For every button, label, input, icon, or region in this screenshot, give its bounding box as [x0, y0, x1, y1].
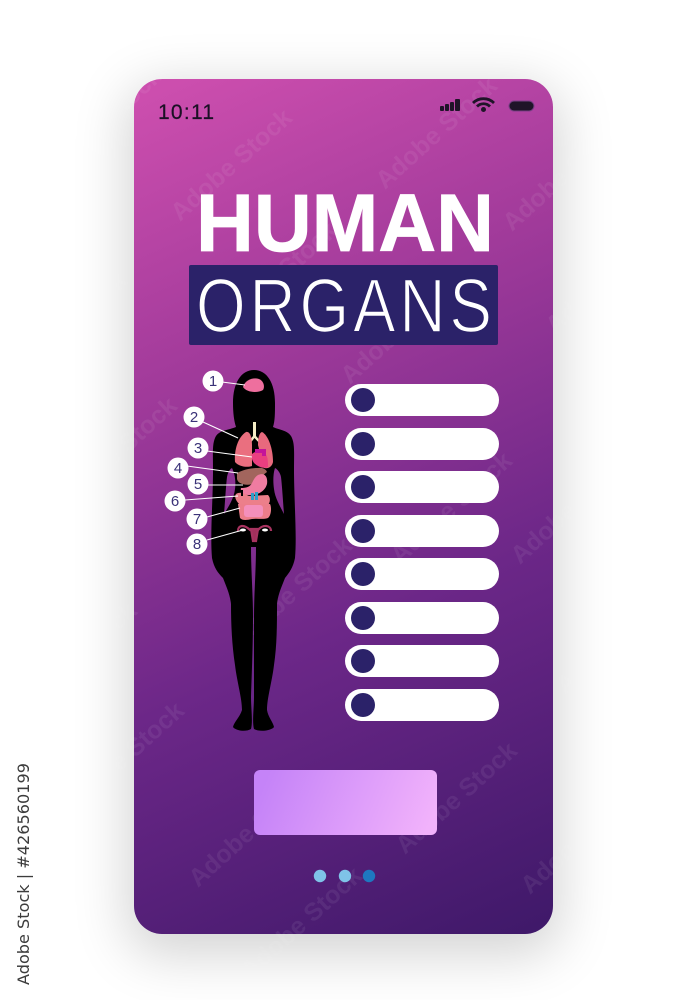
button: [254, 770, 437, 835]
watermark text: Adobe Stock: [57, 696, 190, 819]
marker 1: 1: [209, 373, 217, 390]
marker 3: 3: [194, 440, 202, 457]
watermark text: Adobe Stock: [370, 71, 503, 194]
marker 4: 4: [174, 460, 182, 477]
watermark text: Adobe Stock: [210, 216, 343, 339]
organ: trachea: [247, 422, 263, 445]
watermark text: Adobe Stock: [385, 446, 518, 569]
organ: intestines: [238, 504, 271, 520]
organ: right lung: [258, 432, 273, 468]
organ: upper intestine: [235, 493, 270, 505]
status bar icons: [440, 99, 534, 112]
organ: brain: [243, 378, 264, 392]
watermark text: Adobe Stock: [515, 776, 648, 899]
watermark text: Adobe Stock: [235, 861, 368, 984]
watermark text: Adobe Stock: [0, 266, 133, 389]
phone drop shadow: [134, 79, 553, 934]
watermark text: Adobe Stock: [35, 61, 168, 184]
legend row 2: [345, 428, 499, 460]
legend row 8: [345, 689, 499, 721]
marker 2: [184, 406, 204, 428]
status bar clock: 10:11: [158, 101, 214, 124]
watermark text: Adobe Stock: [50, 391, 183, 514]
marker 1: [202, 370, 224, 392]
organ: liver: [237, 468, 267, 485]
watermark text: Adobe Stock: [225, 531, 358, 654]
watermark text: Adobe Stock: [335, 266, 468, 389]
watermark text: Adobe Stock: [390, 736, 523, 859]
organ: vessels: [255, 449, 266, 456]
watermark text: Adobe Stock: [497, 113, 630, 236]
marker 6: 6: [171, 493, 179, 510]
marker 7: 7: [193, 511, 201, 528]
legend row 7: [345, 645, 499, 677]
subtitle banner: ORGANS: ORGANS: [196, 263, 496, 348]
watermark text: Adobe Stock: [550, 576, 683, 699]
pagination dots: [314, 870, 375, 882]
organ: ovaries: [240, 528, 268, 532]
marker 8: 8: [193, 536, 201, 553]
body silhouette with organs: [211, 370, 296, 731]
marker 5: 5: [194, 476, 202, 493]
silhouette: [211, 370, 296, 731]
icon: battery: [509, 101, 534, 111]
organ: small intestine: [244, 505, 263, 517]
marker 3: [188, 438, 208, 458]
watermark text: Adobe Stock: [183, 769, 316, 892]
stock id label: Adobe Stock | #426560199: [14, 763, 33, 985]
watermark text: Adobe Stock: [165, 103, 298, 226]
callout lines: [185, 382, 252, 540]
watermark text: Adobe Stock: [505, 446, 638, 569]
marker 8: [186, 534, 208, 554]
marker 7: [186, 508, 208, 530]
legend row 3: [345, 471, 499, 503]
legend row 4: [345, 515, 499, 547]
marker 6: [164, 490, 186, 512]
watermark text: Adobe Stock: [540, 216, 673, 339]
phone screen: [134, 79, 553, 934]
icon: signal bars: [440, 99, 460, 111]
organ: kidneys: [241, 490, 258, 500]
organ: left lung: [235, 432, 252, 467]
legend list: [345, 384, 499, 721]
icon: wifi: [473, 99, 494, 112]
legend row 1: [345, 384, 499, 416]
legend row 5: [345, 558, 499, 590]
organ: heart: [252, 451, 268, 468]
number markers: [164, 370, 224, 554]
organ: uterus: [238, 526, 271, 541]
organ: stomach: [241, 474, 267, 495]
title: HUMAN: HUMAN: [196, 178, 494, 269]
watermark text: Adobe Stock: [10, 596, 143, 719]
marker 5: [188, 474, 208, 494]
marker 2: 2: [190, 409, 198, 426]
marker 4: [168, 458, 188, 478]
legend row 6: [345, 602, 499, 634]
